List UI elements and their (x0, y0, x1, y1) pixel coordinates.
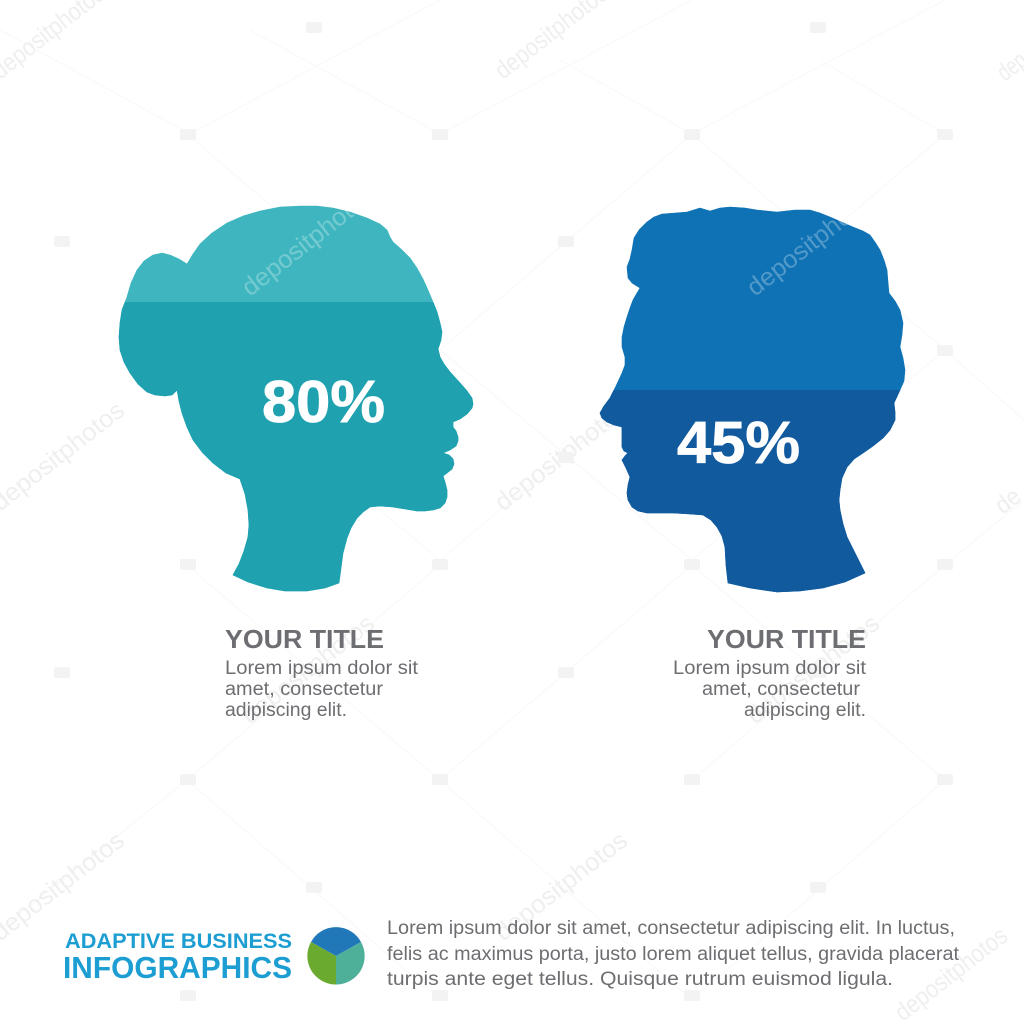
footer description: felis ac maximus porta, justo lorem aliquet tellus, gravida placerat (387, 944, 960, 965)
text block: right caption (673, 624, 867, 721)
left caption title: YOUR TITLE (225, 624, 384, 654)
woman head chart: 80% (119, 181, 473, 591)
icon: three-part circle logo (307, 927, 365, 985)
watermark: background pattern: depositphotos (489, 396, 633, 517)
footer heading: INFOGRAPHICS (63, 950, 292, 985)
footer heading (63, 930, 292, 985)
footer description: Lorem ipsum dolor sit amet, consectetur adipiscing elit. In luctus, (387, 918, 955, 939)
left caption body: Lorem ipsum dolor sit (225, 658, 419, 679)
watermark on woman head: depositphotos (236, 181, 380, 302)
left caption body (225, 658, 419, 721)
value: 45%: 45% (677, 410, 800, 476)
man head chart: 45% (600, 181, 905, 592)
watermark: background pattern: depositphotos (489, 826, 633, 947)
left caption body: adipiscing elit. (225, 700, 347, 721)
right caption body: Lorem ipsum dolor sit (673, 658, 867, 679)
watermark: background pattern: depositphotos (741, 609, 885, 730)
watermark on man head: depositphotos (741, 181, 885, 302)
footer description: turpis ante eget tellus. Quisque rutrum euismod ligula. (387, 969, 893, 990)
left caption body: amet, consectetur (225, 679, 384, 700)
right caption body (673, 658, 867, 721)
watermark: background pattern: depositphotos (236, 609, 380, 730)
text block: left caption (225, 624, 419, 721)
right caption body: adipiscing elit. (744, 700, 866, 721)
value: 80%: 80% (262, 369, 385, 435)
footer heading: ADAPTIVE BUSINESS (65, 930, 292, 953)
right caption body: amet, consectetur (702, 679, 861, 700)
footer description (387, 918, 960, 990)
right caption title: YOUR TITLE (707, 624, 866, 654)
